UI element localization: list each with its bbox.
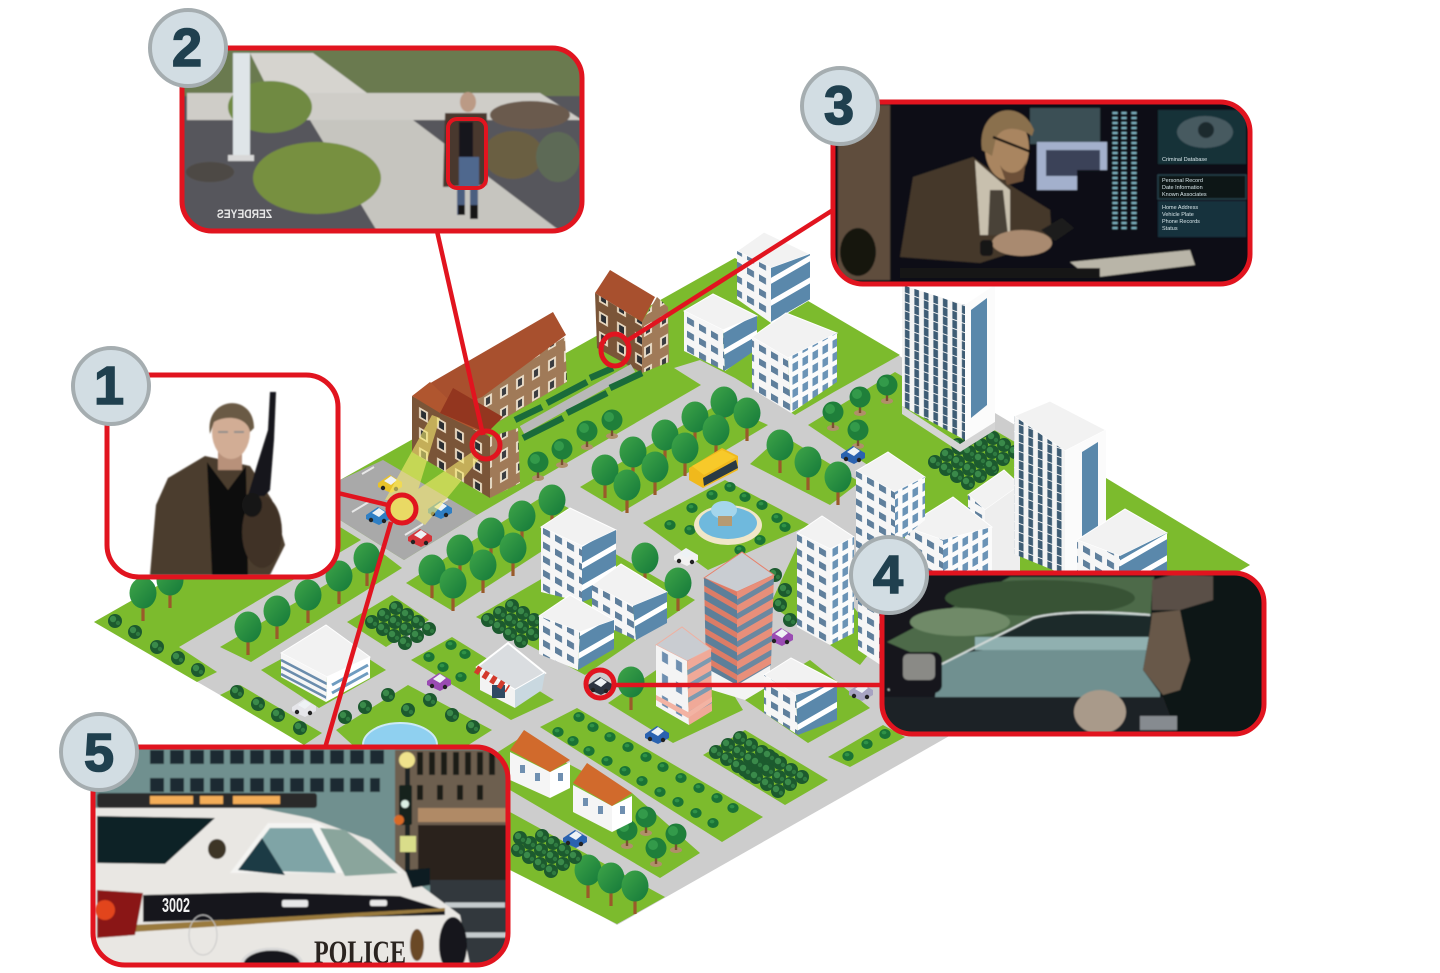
- photo: man with rifle: [150, 392, 285, 575]
- pool: [363, 723, 437, 767]
- badge 1: [73, 348, 149, 424]
- marker: corner building: [601, 334, 629, 366]
- small round bushes: [423, 482, 891, 828]
- parked cars: [366, 475, 452, 547]
- photo: person on walkway: [182, 48, 582, 231]
- panel 4: officer in car: [882, 573, 1264, 734]
- screen text: Status: [1162, 226, 1178, 232]
- isometric city map: [94, 232, 1250, 925]
- panel 2: surveillance camera footage: [182, 48, 582, 231]
- car lettering: POLICE: [314, 935, 406, 971]
- white buildings north: [684, 232, 837, 413]
- college long building: [427, 312, 567, 428]
- screen text: [1162, 157, 1207, 232]
- screen text: Personal Record: [1162, 178, 1203, 184]
- badge 5: 5: [84, 723, 114, 783]
- badge 2: 2: [172, 18, 202, 78]
- panel 3: analyst at monitoring desk: [833, 102, 1250, 284]
- road base: [94, 258, 1250, 925]
- low office building: [281, 625, 370, 702]
- badge 4: [851, 537, 927, 613]
- pink building: [656, 627, 712, 725]
- connector: panel 2 to college: [437, 231, 483, 435]
- white building south: [764, 658, 837, 735]
- building cluster east: [797, 401, 1167, 668]
- houses: [510, 730, 632, 832]
- corner brick building: [595, 270, 669, 373]
- parking lot: [340, 460, 477, 560]
- panel 5: police car: [93, 747, 508, 973]
- trees: [130, 374, 898, 914]
- city blocks: [94, 258, 1250, 924]
- shop: [476, 643, 545, 708]
- badge 5: [61, 714, 137, 790]
- badge 2: [150, 10, 226, 86]
- connector: panel 3 to corner building: [625, 210, 833, 342]
- screen text: Phone Records: [1162, 219, 1200, 225]
- car number: 3002: [162, 895, 190, 917]
- detection box: [448, 119, 486, 188]
- hedges and path: [515, 368, 642, 438]
- badge 1: 1: [94, 356, 124, 416]
- screen text: Known Associates: [1162, 192, 1207, 198]
- marker: parking lot: [388, 495, 416, 523]
- photo: analyst with phone: [833, 102, 1250, 284]
- bush patches: [108, 424, 1022, 878]
- tall tower north: [902, 285, 995, 452]
- central white buildings: [539, 508, 667, 670]
- badge 4: 4: [873, 545, 903, 605]
- college front building: [412, 382, 520, 498]
- camera watermark: ZERDEYES: [217, 207, 272, 221]
- connector: panel 1 to parking lot: [338, 493, 392, 506]
- school bus: [689, 448, 738, 488]
- badge 3: [802, 68, 878, 144]
- badge 3: 3: [824, 76, 854, 136]
- street vehicles: [292, 446, 873, 848]
- red tower: [704, 552, 774, 700]
- screen text: Date Information: [1162, 185, 1203, 191]
- panel 1: armed man: [107, 375, 338, 577]
- connector: panel 5 to parking lot: [325, 522, 391, 748]
- screen text: Vehicle Plate: [1162, 212, 1194, 218]
- photo: driver looking through window: [882, 573, 1264, 734]
- screen text: Home Address: [1162, 205, 1198, 211]
- marker: car: [586, 670, 614, 698]
- fountain: [694, 501, 762, 545]
- yellow light beams: [385, 415, 480, 525]
- screen text: Criminal Database: [1162, 157, 1207, 163]
- photo: police cruiser: [93, 747, 508, 973]
- marker: college window: [472, 431, 500, 459]
- connector: panel 4 to car: [612, 683, 884, 687]
